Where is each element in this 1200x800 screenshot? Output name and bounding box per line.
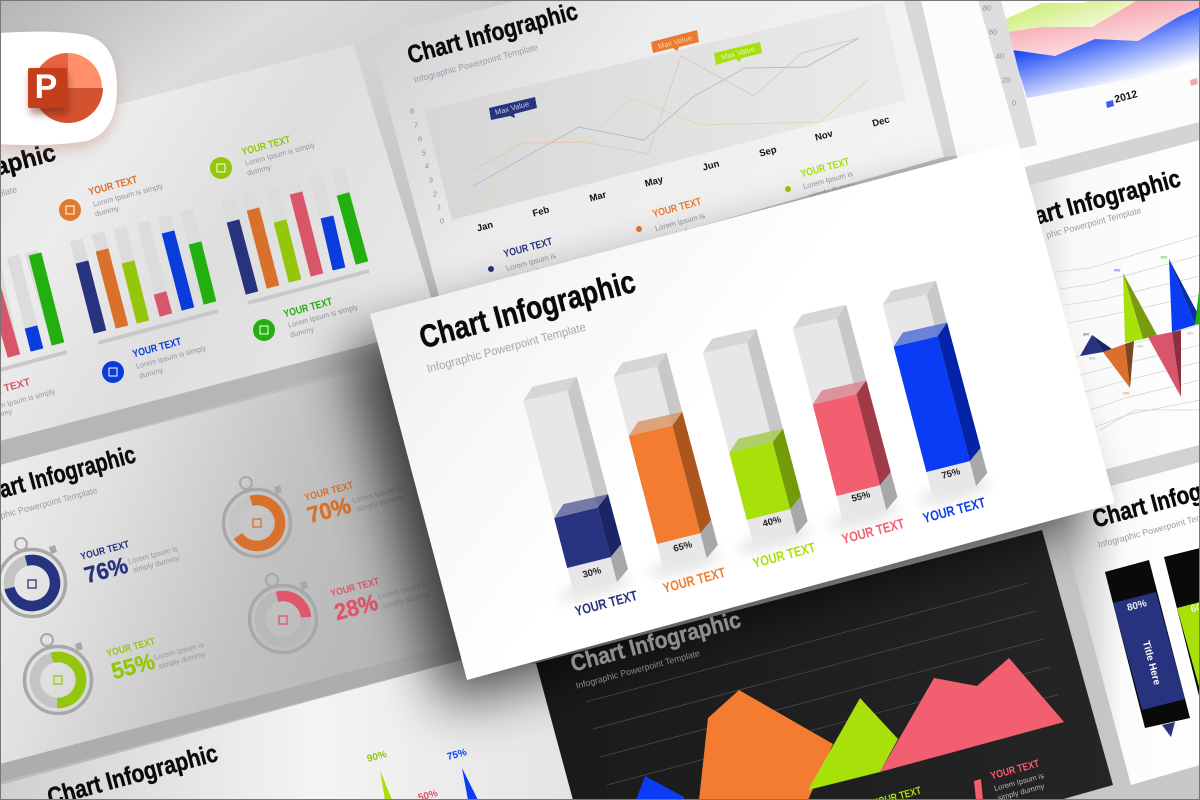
triangle: navy	[1080, 335, 1112, 356]
legend: green item: Lorem Ipsum is simply	[287, 302, 359, 330]
legend: pink swatch	[1190, 78, 1198, 86]
stopwatch: pink 28%	[250, 574, 316, 652]
chart: y axis labels: 4	[425, 162, 429, 170]
chart: month labels: Jun	[701, 158, 721, 173]
legend: pink item: YOUR TEXT	[989, 758, 1041, 782]
chart: y axis labels: 0	[440, 216, 444, 226]
panel: vertical title bars	[1060, 461, 1200, 785]
chart: grid lines	[1055, 235, 1200, 430]
bar: blue 75%: YOUR TEXT	[921, 494, 987, 526]
chart: y axis labels: 8	[410, 106, 414, 116]
legend: orange line: Lorem Ipsum is	[654, 211, 706, 233]
legend: pink item	[0, 376, 56, 422]
legend: 2012	[1106, 88, 1139, 108]
labels: triangle values: 300	[1187, 330, 1194, 336]
legend: orange item: Lorem Ipsum is simply	[92, 181, 164, 209]
chart: month labels	[476, 114, 891, 234]
legend: lime line: simply dummy	[808, 179, 857, 201]
text: line chart subtitle: Infographic Powerpoint Template	[413, 42, 539, 85]
spike: blue	[462, 768, 478, 800]
icon: PowerPoint disc	[33, 53, 103, 123]
panel: dark area chart	[536, 530, 1113, 800]
callout: orange max value: Max Value	[657, 33, 693, 51]
callout: lime max value	[714, 42, 762, 65]
panel: line chart	[370, 0, 961, 300]
callout: navy max value	[489, 97, 537, 120]
triangle: orange	[1103, 341, 1134, 388]
band: gap above lower right panel	[1100, 445, 1200, 488]
chart: y axis labels	[410, 106, 444, 226]
legend: orange line	[636, 196, 709, 243]
panel: main 3D bar chart	[370, 142, 1115, 680]
bar: navy 80%: Title Here	[1140, 640, 1162, 687]
heading: main title: Chart Infographic	[415, 263, 639, 355]
callout: lime max value: Max Value	[720, 44, 756, 62]
bar: blue 75%: 75%	[940, 466, 962, 482]
chart: green area	[1003, 0, 1140, 32]
panel: bottom spike chart	[0, 655, 575, 800]
legend: orange item: YOUR TEXT	[87, 174, 139, 198]
legend: 2012: 2012	[1113, 88, 1139, 106]
chart: y axis labels: 7	[414, 120, 418, 130]
legend: green item: dummy	[289, 324, 315, 340]
bar: navy 80%	[1105, 560, 1190, 737]
chart: y axis labels: 80	[983, 4, 991, 12]
legend: lime item	[210, 134, 316, 179]
chart: grid lines	[586, 583, 1058, 785]
panel: 3D triangle chart	[1030, 140, 1200, 490]
legend: blue item: dummy	[138, 365, 164, 381]
panel: circle progress	[0, 366, 470, 763]
icon: PowerPoint badge	[0, 32, 117, 145]
chart: y axis labels: 3	[429, 176, 433, 184]
area: pink	[880, 658, 1064, 772]
text: pink 28%: Lorem Ipsum is	[377, 579, 429, 601]
labels: triangle values	[1083, 254, 1194, 396]
label: 75%: 75%	[446, 747, 468, 763]
text: pink 28%: simply dummy	[382, 589, 431, 611]
chart: y axis labels: 6	[418, 134, 422, 144]
chart: y axis labels	[983, 4, 1016, 108]
bar: pink 55%: 55%	[850, 489, 872, 505]
text: dark panel subtitle: Infographic Powerpoint Template	[575, 648, 701, 691]
legend: navy line: Lorem Ipsum is	[505, 251, 557, 273]
stopwatch: lime 55%	[24, 634, 92, 714]
legend: lime item: YOUR TEXT	[240, 134, 292, 158]
triangle: lime	[1123, 273, 1157, 343]
text: navy 76%: Lorem Ipsum is	[127, 544, 179, 566]
text: orange 70%: YOUR TEXT	[303, 480, 355, 504]
bar: navy 30%: YOUR TEXT	[573, 587, 639, 619]
text: lime 55%: 55%	[108, 648, 158, 684]
text: lime 55%	[105, 636, 207, 684]
panel: area chart	[921, 0, 1200, 170]
bar: pink 55%: YOUR TEXT	[840, 515, 906, 547]
band: gap below bars panel	[0, 326, 440, 465]
bars: group one	[0, 237, 67, 370]
callout: navy max value: Max Value	[494, 99, 530, 117]
chart: y axis labels: 20	[1002, 76, 1010, 84]
text: navy 76%: 76%	[81, 552, 131, 588]
chart: plot area	[424, 2, 906, 220]
chart: blue area	[1012, 7, 1200, 98]
area: lime	[808, 698, 898, 790]
chart: month labels: Jan	[476, 220, 495, 234]
text: navy 76%: simply dummy	[132, 553, 181, 575]
text: lime 55%: simply dummy	[158, 649, 207, 671]
legend: navy line: simply dummy	[511, 261, 560, 283]
labels: triangle values: 200	[1137, 344, 1144, 348]
chart: month labels: Sep	[758, 144, 778, 160]
chart: month labels: Mar	[588, 189, 608, 205]
shadow: main panel	[345, 190, 1085, 705]
text: pink 28%: YOUR TEXT	[329, 576, 381, 600]
bar: navy 30%: 30%	[581, 565, 603, 581]
chart: data lines	[470, 38, 869, 213]
stopwatch: navy 76%	[0, 538, 66, 616]
legend: blue item: Lorem Ipsum is simply	[135, 343, 207, 371]
chart: y axis labels: 40	[996, 52, 1004, 60]
strip: y axis	[978, 0, 1037, 149]
legend: navy line	[488, 236, 560, 283]
text: orange 70%: simply dummy	[356, 492, 405, 514]
panel: grouped bar chart	[0, 44, 440, 441]
legend: navy line: YOUR TEXT	[502, 236, 554, 260]
labels: triangle values: 300	[1089, 356, 1096, 360]
chart: pink area	[1007, 0, 1200, 56]
area: orange	[699, 690, 833, 800]
heading: dark panel title: Chart Infographic	[568, 606, 744, 677]
legend: lime line: YOUR TEXT	[799, 156, 851, 180]
legend: orange line: simply dummy	[660, 221, 709, 243]
legend: green item	[253, 296, 359, 341]
text: orange 70%: 70%	[304, 492, 354, 528]
band: gap below circle panel	[0, 640, 480, 782]
legend: lime item: Lorem Ipsum is simply	[244, 140, 316, 168]
legend: pink item: Lorem Ipsum is	[993, 771, 1045, 793]
text: navy 76%	[79, 539, 181, 588]
spike: lime	[380, 770, 392, 800]
legend: orange line: YOUR TEXT	[651, 196, 703, 220]
icon: PowerPoint tile shadow	[30, 72, 68, 114]
legend: orange item	[59, 174, 164, 221]
chart: y axis labels: 0	[1012, 98, 1016, 108]
bar: orange 65%	[613, 353, 727, 596]
bar: navy 80%: 80%	[1126, 598, 1148, 614]
legend: blue item: YOUR TEXT	[131, 336, 183, 360]
text: orange 70%: Lorem Ipsum is	[351, 483, 403, 505]
triangle: pink	[1148, 330, 1181, 397]
bar: lime 40%	[703, 329, 817, 571]
bar: lime 40%: 40%	[761, 514, 783, 530]
legend: pink item	[974, 758, 1046, 800]
area: blue	[636, 776, 684, 800]
triangle: green	[1195, 282, 1200, 325]
chart: month labels: Dec	[871, 114, 891, 130]
legend: lime line: Lorem Ipsum is	[802, 169, 854, 191]
strip: panel edge	[904, 0, 961, 157]
chart: month labels: May	[644, 174, 665, 190]
text: triangle chart subtitle: phic Powerpoint Template	[1045, 205, 1142, 240]
text: lime 55%: YOUR TEXT	[105, 636, 157, 660]
legend: green item: YOUR TEXT	[282, 296, 334, 320]
chart: month labels: Feb	[531, 204, 551, 219]
bar: blue 75%	[883, 281, 993, 526]
text: main subtitle: Infographic Powerpoint Template	[425, 320, 588, 376]
triangle: blue	[1169, 259, 1197, 332]
legend: orange item: dummy	[94, 203, 120, 219]
chart: y axis labels: 60	[989, 28, 997, 36]
legend: lime line	[785, 156, 857, 201]
labels: triangle values: 200	[1123, 390, 1130, 396]
chart: month labels: Nov	[814, 128, 835, 144]
stopwatch: orange 70%	[224, 477, 290, 556]
labels: triangle values: 400	[1114, 268, 1121, 272]
legend: blue item	[102, 336, 207, 383]
bar: orange 65%: YOUR TEXT	[661, 564, 727, 596]
text: pink 28%: 28%	[331, 589, 381, 625]
bars: group three	[227, 169, 369, 303]
chart: y axis labels: 1	[437, 202, 441, 212]
text: navy 76%: YOUR TEXT	[79, 539, 131, 563]
heading: circle panel title: art Infographic	[0, 440, 139, 504]
label: 90%: 90%	[366, 749, 388, 765]
text: lime 55%: Lorem Ipsum is	[153, 640, 205, 662]
bar: pink 55%	[793, 305, 906, 547]
text: circle panel subtitle: phic Powerpoint Template	[0, 485, 98, 521]
icon: PowerPoint letter tile: P	[35, 68, 57, 106]
legend: lime item: dummy	[246, 162, 272, 178]
text: pink 28%	[329, 576, 431, 625]
bar: lime 40%: YOUR TEXT	[751, 539, 817, 571]
chart: y axis labels: 5	[422, 148, 426, 158]
band: gap between right panels	[1025, 122, 1200, 185]
labels: triangle values: 500	[1161, 254, 1168, 260]
labels: triangle values: 300	[1083, 332, 1090, 336]
bar: lime 60%	[1164, 548, 1200, 700]
callout: orange max value	[651, 30, 699, 53]
bar: navy 30%	[523, 377, 639, 619]
text: orange 70%	[303, 480, 405, 528]
bar: orange 65%: 65%	[672, 539, 694, 555]
chart: y axis labels: 2	[433, 190, 437, 198]
bars: group two	[76, 210, 218, 343]
